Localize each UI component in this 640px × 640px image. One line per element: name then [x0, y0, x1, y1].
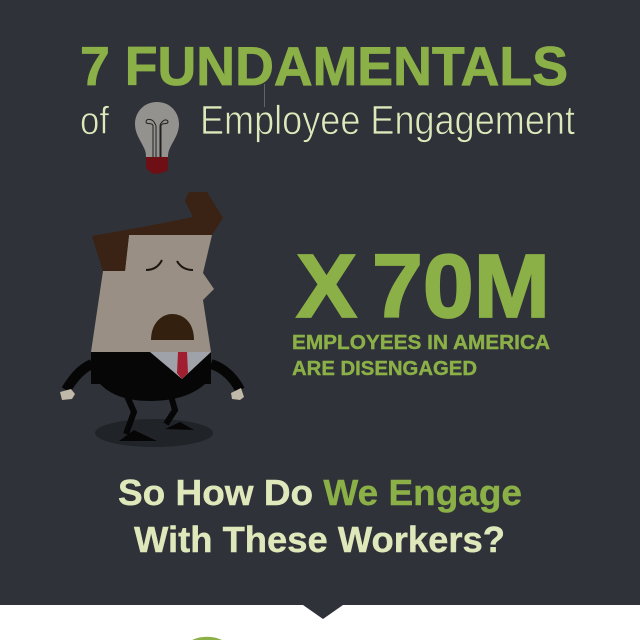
title: of [80, 100, 109, 143]
shirt [150, 352, 211, 379]
question heading: So How Do We Engage [118, 472, 522, 513]
statistic: ARE DISENGAGED [292, 357, 477, 380]
legs and feet [119, 396, 194, 441]
hair [92, 192, 223, 271]
shadow [95, 419, 213, 447]
hands [60, 388, 244, 400]
mouth [151, 314, 194, 340]
statistic: 70M [372, 237, 550, 337]
statistic: EMPLOYEES IN AMERICA [292, 331, 550, 354]
face [91, 235, 214, 352]
arrow [303, 605, 343, 619]
tie [177, 352, 188, 379]
body [91, 352, 211, 401]
question heading: With These Workers? [134, 519, 505, 560]
icon: green circle [192, 637, 222, 640]
arms [66, 364, 240, 390]
statistic [292, 237, 550, 380]
question heading [118, 472, 522, 560]
icon: light bulb [135, 102, 179, 174]
statistic: X [296, 237, 357, 337]
illustration: disengaged employee [60, 192, 244, 447]
title: 7 FUNDAMENTALS [80, 35, 568, 97]
eyes [146, 260, 193, 270]
title [80, 35, 576, 143]
white section [0, 605, 640, 640]
title: Employee Engagement [200, 97, 576, 143]
